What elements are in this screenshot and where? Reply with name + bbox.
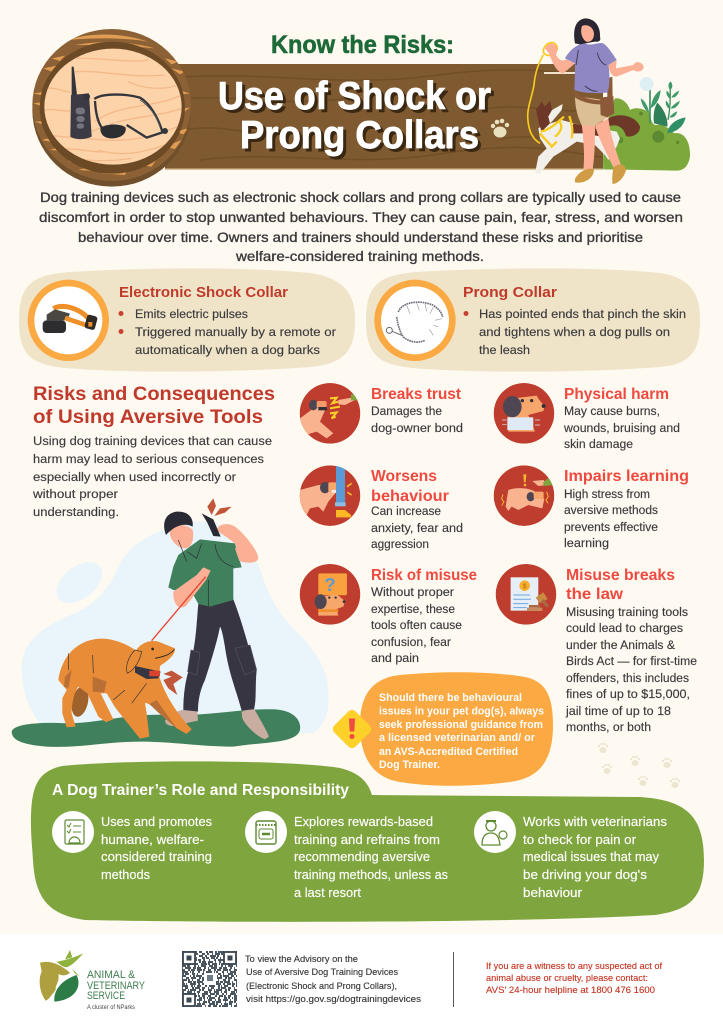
- panel: Electronic Shock Collar: [19, 268, 355, 372]
- callout: seek professional guidance: a licensed veterinarian and/ or: [379, 732, 536, 744]
- heading: Risks and Consequences: Risks and Consequences: [33, 383, 275, 405]
- text block: risks intro: especially when used incorrectly or: [33, 470, 236, 484]
- text: misuse breaks the law: under the Animals &: [566, 638, 675, 652]
- text: explores rewards-based: training methods, unless as: [294, 867, 448, 882]
- text: works with veterinarians: to check for pain or: [523, 832, 637, 847]
- text: worsens behaviour: Worsens: [371, 468, 437, 485]
- banner heading: Use of Shock or Prong Collars: Prong Collars: [240, 114, 479, 157]
- bullet text: and tightens when a dog pulls on: [479, 325, 670, 339]
- text: risk of misuse: confusion, fear: [371, 635, 451, 649]
- text: misuse breaks the law: jail time of up to 18: [565, 704, 671, 718]
- text: breaks trust: [371, 386, 463, 435]
- text: advisory link: (Electronic Shock and Prong Collars),: [246, 981, 397, 991]
- dog: [58, 639, 192, 739]
- text block: risks intro: understanding.: [33, 505, 119, 519]
- text: advisory link: Use of Aversive Dog Training Devices: [246, 967, 399, 977]
- text: impairs learning: High stress from: [564, 487, 650, 501]
- text: uses and promotes: [101, 814, 212, 882]
- text block: risks intro: [32, 434, 272, 519]
- text: misuse breaks the law: months, or both: [566, 720, 651, 734]
- shock bolts: [163, 671, 183, 695]
- footer band: [0, 934, 723, 1024]
- text: uses and promotes: Uses and promotes: [101, 814, 212, 829]
- text: breaks trust: Damages the: [371, 404, 442, 418]
- intro paragraph: Dog training devices such as electronic shock collars and prong collars are typically used to cause: [40, 189, 681, 205]
- text: misuse breaks the law: the law: [566, 586, 624, 603]
- text block: risks intro: without proper: [32, 487, 118, 501]
- text: works with veterinarians: be driving your dog's: [523, 867, 648, 882]
- text: uses and promotes: considered training: [101, 849, 212, 864]
- banner heading: Use of Shock or Prong Collars: Use of Shock or: [218, 75, 491, 118]
- plants: [640, 77, 686, 133]
- icon: misuse breaks the law: [496, 564, 556, 625]
- illustration: wooden disc with shock collar remote: [32, 29, 191, 187]
- text: physical harm: skin damage: [564, 437, 633, 451]
- text: physical harm: Physical harm: [564, 386, 669, 403]
- text: animal cruelty helpline: AVS’ 24-hour helpline at 1800 476 1600: [486, 985, 655, 996]
- logo text: [87, 969, 146, 1011]
- callout: seek professional guidance: [360, 672, 553, 786]
- small blob: [49, 554, 110, 611]
- text: impairs learning: [564, 468, 689, 550]
- decorative paw prints: [598, 743, 680, 788]
- heading: Prong Collar: [463, 285, 557, 301]
- text: physical harm: May cause burns,: [564, 404, 660, 418]
- image: prong collar in orange ring: [374, 280, 456, 361]
- heading: A Dog Trainer’s Role and Responsibility: [52, 782, 349, 799]
- ground: [12, 709, 300, 747]
- text: misuse breaks the law: could lead to charges: [566, 621, 683, 635]
- icon: paw print on banner: [491, 119, 509, 138]
- text: risk of misuse: [371, 567, 477, 665]
- logo text: SERVICE: [87, 990, 125, 1002]
- text: breaks trust: dog-owner bond: [371, 421, 463, 435]
- text: worsens behaviour: Can increase: [371, 504, 441, 518]
- background blob: [22, 521, 329, 733]
- man: [164, 498, 269, 739]
- text: misuse breaks the law: Misusing training tools: [566, 605, 688, 619]
- text: works with veterinarians: medical issues that may: [523, 849, 659, 864]
- text: misuse breaks the law: Birds Act — for first-time: [566, 654, 697, 668]
- intro paragraph: [39, 189, 683, 264]
- leash: [528, 43, 557, 143]
- text: explores rewards-based: Explores rewards-based: [294, 814, 433, 829]
- text: animal cruelty helpline: If you are a witness to any suspected act of: [486, 961, 662, 972]
- text: worsens behaviour: anxiety, fear and: [371, 521, 463, 535]
- callout: seek professional guidance: seek professional guidance from: [379, 719, 543, 731]
- text: impairs learning: prevents effective: [564, 520, 658, 534]
- text: physical harm: wounds, bruising and: [563, 421, 680, 435]
- text: advisory link: [245, 954, 422, 1004]
- banner heading: Use of Shock or Prong Collars: Prong Collars: [243, 117, 482, 160]
- text: explores rewards-based: training and refrains from: [294, 832, 440, 847]
- leash: [152, 577, 206, 641]
- icon: risk of misuse: ?: [324, 574, 336, 595]
- callout: seek professional guidance: issues in your pet dog(s), always: [379, 706, 544, 718]
- text: worsens behaviour: behaviour: [371, 488, 449, 505]
- icon: veterinarian with dog: [474, 811, 516, 853]
- text: breaks trust: Breaks trust: [371, 386, 461, 403]
- text: misuse breaks the law: Misuse breaks: [566, 567, 675, 584]
- text: explores rewards-based: [294, 814, 448, 900]
- icon: physical harm: [494, 383, 554, 444]
- banner: wooden title board: [165, 64, 610, 170]
- QR code: [182, 951, 237, 1007]
- text block: risks intro: Using dog training devices that can cause: [33, 434, 272, 448]
- text: misuse breaks the law: [565, 567, 697, 734]
- text: impairs learning: learning: [564, 536, 609, 550]
- text: advisory link: visit https://go.gov.sg/dogtrainingdevices: [246, 994, 422, 1004]
- text: works with veterinarians: Works with veterinarians: [523, 814, 667, 829]
- icon: risk of misuse: [300, 564, 360, 625]
- text: risk of misuse: tools often cause: [371, 618, 462, 632]
- icon: checklist: [52, 811, 94, 853]
- logo text: VETERINARY: [87, 980, 146, 992]
- logo mark: [40, 950, 83, 1002]
- bullet text: [464, 307, 686, 357]
- text: advisory link: To view the Advisory on the: [245, 954, 358, 964]
- icon: misuse breaks the law: $: [523, 581, 527, 590]
- icon: breaks trust: [300, 383, 360, 444]
- illustration: woman walking dog with bush: [528, 18, 690, 184]
- panel: A Dog Trainer's Role and Responsibility: [31, 761, 704, 922]
- title: Know the Risks: Know the Risks:: [271, 31, 454, 59]
- icon: impairs learning: [494, 465, 555, 526]
- intro paragraph: welfare-considered training methods.: [235, 248, 484, 264]
- heading: Risks and Consequences: of Using Aversive Tools: [33, 406, 263, 428]
- text: impairs learning: aversive methods: [564, 503, 658, 517]
- bush: [603, 98, 690, 171]
- text block: risks intro: harm may lead to serious consequences: [33, 452, 264, 466]
- icons: risk circles: [300, 383, 556, 625]
- text: uses and promotes: methods: [101, 867, 150, 882]
- dog: [535, 101, 640, 173]
- text: worsens behaviour: aggression: [371, 537, 429, 551]
- icon: shock collar remote and collar: [70, 67, 168, 139]
- text: misuse breaks the law: offenders, this includes: [566, 671, 689, 685]
- intro paragraph: discomfort in order to stop unwanted behaviours. They can cause pain, fear, stress, and worsen: [39, 209, 683, 225]
- bullet list: Triggered manually by a remote or: [135, 325, 336, 339]
- icon: treat bag: [245, 811, 287, 853]
- woman: [545, 18, 644, 184]
- logo text: ANIMAL &: [87, 969, 136, 981]
- text: explores rewards-based: a last resort: [294, 885, 361, 900]
- heading: Electronic Shock Collar: [119, 285, 288, 301]
- text: works with veterinarians: behaviour: [523, 885, 583, 900]
- intro paragraph: behaviour over time. Owners and trainers should understand these risks and prioritise: [78, 229, 643, 245]
- logo text: A cluster of NParks: [87, 1005, 135, 1011]
- icon: warning diamond: [331, 708, 373, 750]
- bullet list: automatically when a dog barks: [135, 343, 320, 357]
- text: worsens behaviour: [371, 468, 463, 551]
- panel: Prong Collar: [366, 268, 700, 372]
- bullet list: [118, 307, 336, 357]
- icon: worsens behaviour: [300, 465, 360, 526]
- bullet text: Has pointed ends that pinch the skin: [479, 307, 686, 321]
- text: impairs learning: Impairs learning: [564, 468, 689, 485]
- text: risk of misuse: Without proper: [371, 585, 454, 599]
- callout: seek professional guidance: Should there be behavioural: [379, 692, 522, 704]
- text: animal cruelty helpline: [486, 961, 662, 996]
- text: uses and promotes: humane, welfare-: [101, 832, 204, 847]
- text: explores rewards-based: recommending aversive: [294, 849, 430, 864]
- text: physical harm: [563, 386, 680, 451]
- bullet text: the leash: [479, 343, 530, 357]
- illustration: trainer using shock collar on dog: [12, 498, 329, 747]
- text: misuse breaks the law: fines of up to $15,000,: [566, 687, 690, 701]
- text: risk of misuse: and pain: [371, 651, 419, 665]
- callout: seek professional guidance: Dog Trainer.: [379, 759, 440, 771]
- text: works with veterinarians: [523, 814, 667, 900]
- banner heading: Use of Shock or Prong Collars: [218, 75, 494, 160]
- callout: seek professional guidance: an AVS-Accredited Certified: [379, 746, 518, 758]
- bullet list: Emits electric pulses: [135, 307, 248, 321]
- image: shock collar in orange ring: [28, 280, 109, 361]
- text: risk of misuse: expertise, these: [371, 602, 455, 616]
- logo: Animal & Veterinary Service: [40, 950, 146, 1011]
- heading: Risks and Consequences: [33, 383, 275, 428]
- text: animal cruelty helpline: animal abuse or cruelty, please contact:: [486, 973, 648, 984]
- banner heading: Use of Shock or Prong Collars: Use of Shock or: [221, 78, 494, 121]
- text: risk of misuse: Risk of misuse: [371, 567, 477, 584]
